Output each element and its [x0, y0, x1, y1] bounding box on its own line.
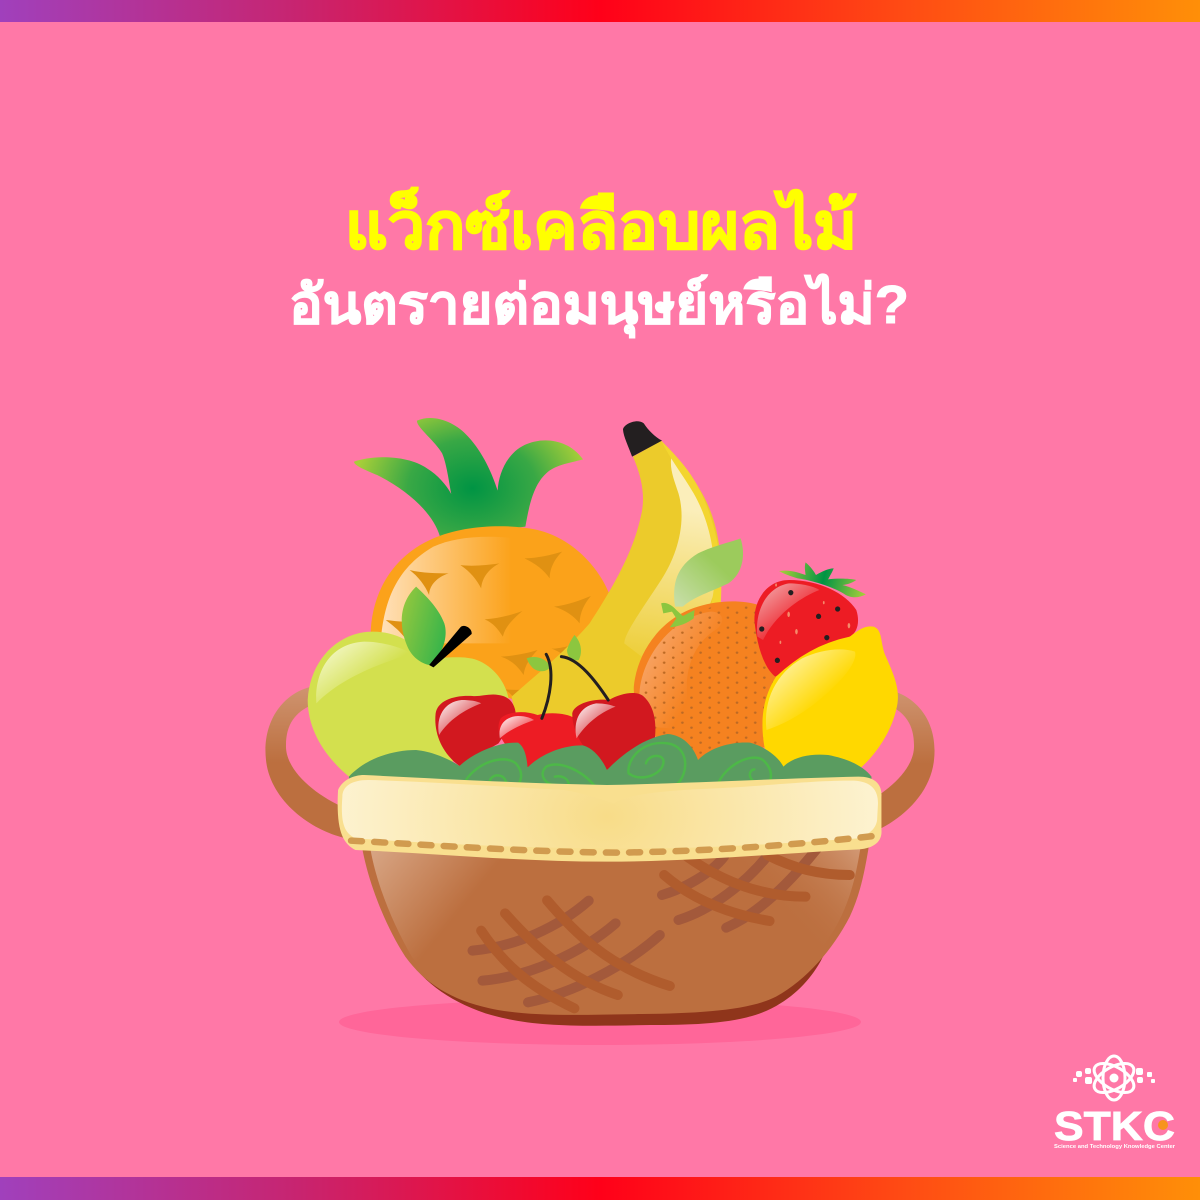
subtitle question: อันตรายต่อมนุษย์หรือไม่?	[289, 273, 909, 339]
basket shadow	[339, 999, 861, 1045]
cloth rim	[338, 775, 882, 862]
green leaf lining	[349, 734, 871, 790]
basket handle right	[855, 690, 935, 838]
basket handle left	[265, 687, 345, 838]
orange	[634, 601, 785, 763]
weave right	[662, 848, 850, 928]
basket underside	[401, 948, 824, 1026]
logo tagline: Science and Technology Knowledge Center	[1054, 1144, 1176, 1150]
apple stem	[429, 626, 472, 667]
pineapple crown	[354, 418, 583, 537]
logo wordmark: STKC	[1054, 1103, 1175, 1149]
logo atom icon	[1073, 1056, 1155, 1100]
apple leaf	[402, 587, 446, 665]
cloth stitching	[351, 836, 874, 853]
banana	[512, 421, 721, 737]
cherries	[435, 635, 655, 770]
bottom gradient bar	[0, 1177, 1200, 1200]
basket body	[362, 843, 869, 1015]
title: แว็กซ์เคลือบผลไม้	[345, 188, 857, 262]
lemon	[762, 626, 898, 773]
fruits	[308, 418, 898, 790]
logo orange dot	[1158, 1120, 1168, 1130]
pineapple	[371, 526, 609, 700]
top gradient bar	[0, 0, 1200, 22]
banana leaf	[674, 538, 743, 607]
basket	[338, 775, 882, 1026]
strawberry	[754, 562, 866, 677]
logo: STKC	[1054, 1056, 1176, 1150]
weave left	[472, 900, 670, 1008]
title	[289, 188, 909, 339]
illustration: fruit basket	[265, 418, 935, 1045]
apple	[308, 587, 509, 777]
